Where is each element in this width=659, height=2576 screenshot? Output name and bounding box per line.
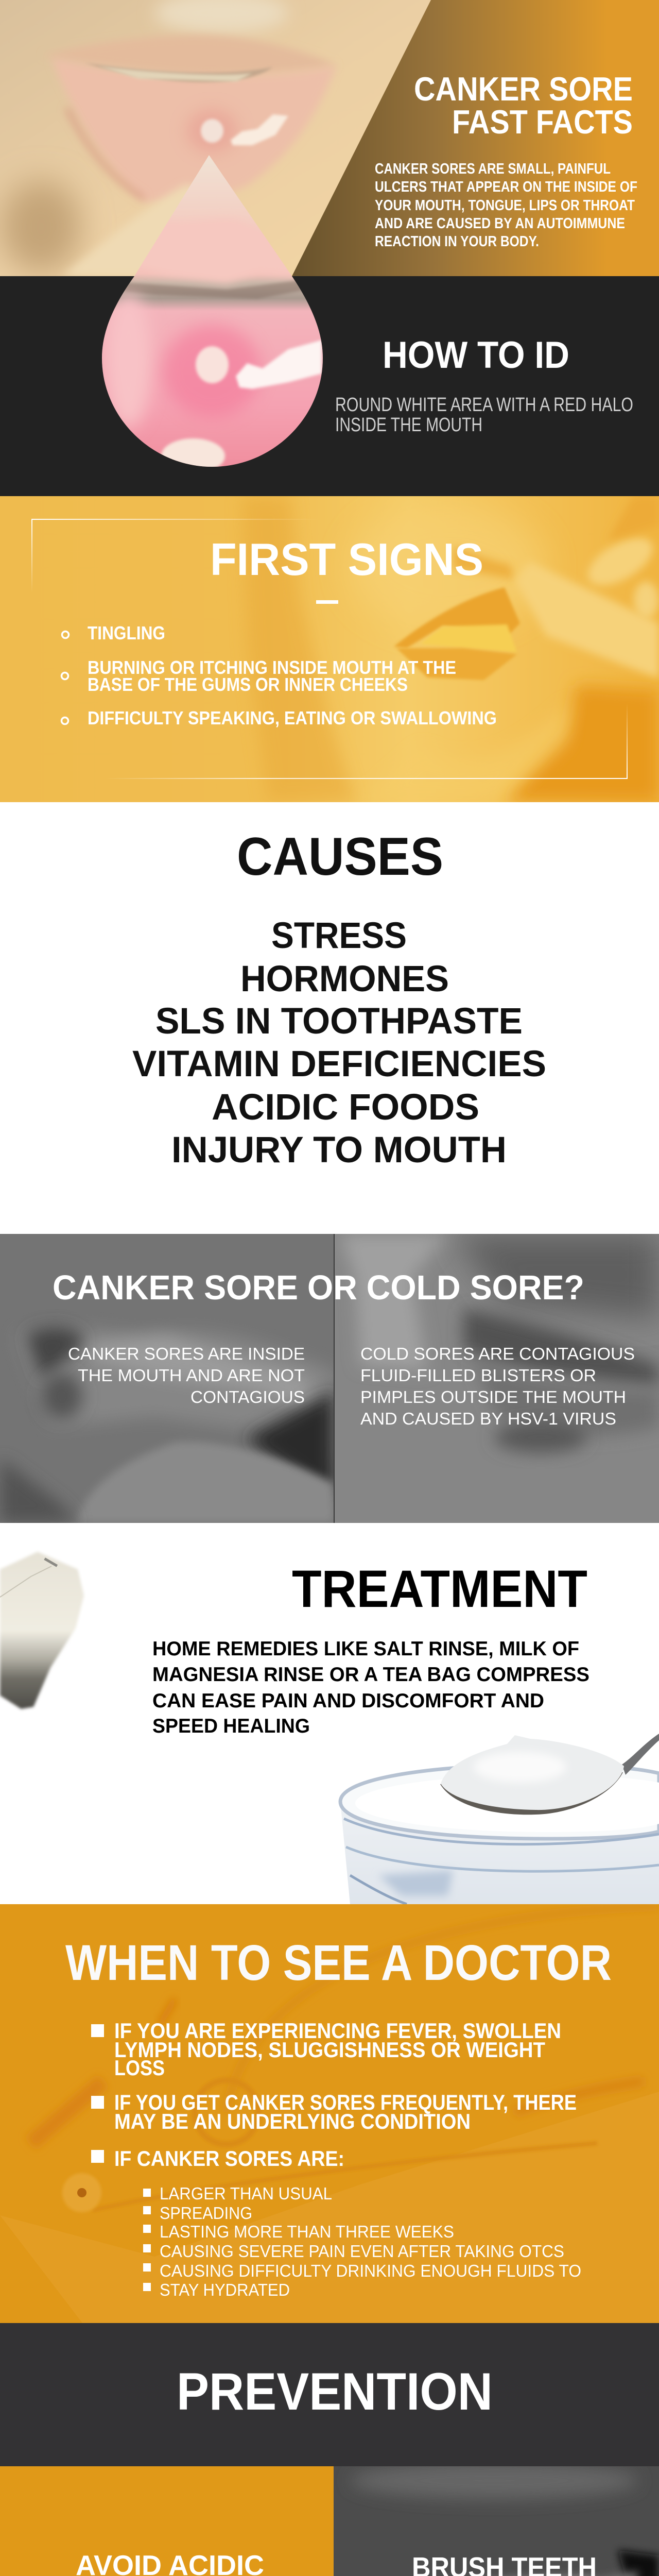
heading: canker sore or cold sore: CANKER SORE OR COLD SORE?	[53, 1268, 584, 1307]
text block: treatment: MAGNESIA RINSE OR A TEA BAG COMPRESS	[152, 1664, 589, 1686]
panel: prevention header	[0, 2323, 659, 2466]
text block: identification	[335, 394, 633, 436]
dark background	[0, 2323, 659, 2466]
text block: cold sores	[360, 1344, 635, 1428]
dark background	[0, 276, 659, 496]
list: canker sore warning signs: LARGER THAN USUAL	[160, 2184, 332, 2203]
list: canker sore warning signs: STAY HYDRATED	[160, 2280, 290, 2299]
list: first signs: BASE OF THE GUMS OR INNER CHEEKS	[88, 674, 408, 695]
heading: treatment: TREATMENT	[292, 1560, 587, 1618]
panel: treatment	[0, 1523, 659, 1904]
text block: cold sores: AND CAUSED BY HSV-1 VIRUS	[360, 1409, 616, 1428]
list: causes: STRESS	[271, 916, 407, 956]
gold gradient background	[0, 0, 659, 276]
list: canker sore warning signs	[143, 2184, 581, 2299]
text block: cold sores: PIMPLES OUTSIDE THE MOUTH	[360, 1387, 626, 1406]
panel: canker sore or cold sore	[0, 1234, 659, 1523]
photo: teeth in greyscale	[334, 2463, 659, 2576]
text block: definition	[375, 161, 637, 250]
text block: cold sores: FLUID-FILLED BLISTERS OR	[360, 1366, 596, 1385]
text block: cold sores: COLD SORES ARE CONTAGIOUS	[360, 1344, 635, 1363]
icon: glass with spoon of baking soda	[340, 1734, 659, 1904]
list: when to see a doctor: IF YOU ARE EXPERIENCING FEVER, SWOLLEN	[114, 2019, 561, 2043]
photo: citrus fruits	[0, 2466, 334, 2576]
text block: treatment: CAN EASE PAIN AND DISCOMFORT AND	[152, 1690, 544, 1712]
list: causes: SLS IN TOOTHPASTE	[155, 1001, 523, 1042]
title: canker sore fast facts: CANKER SORE	[414, 70, 633, 108]
list: canker sore warning signs: CAUSING DIFFICULTY DRINKING ENOUGH FLUIDS TO	[160, 2261, 581, 2280]
text block: canker sores: THE MOUTH AND ARE NOT	[78, 1366, 305, 1385]
text block: identification: INSIDE THE MOUTH	[335, 414, 482, 436]
list: causes: INJURY TO MOUTH	[171, 1130, 507, 1171]
list: causes: VITAMIN DEFICIENCIES	[132, 1044, 546, 1084]
list: canker sore warning signs: CAUSING SEVERE PAIN EVEN AFTER TAKING OTCS	[160, 2242, 564, 2261]
text block: canker sores: CANKER SORES ARE INSIDE	[68, 1344, 305, 1363]
list: canker sore warning signs: SPREADING	[160, 2204, 252, 2223]
list: first signs: BURNING OR ITCHING INSIDE MOUTH AT THE	[88, 657, 456, 678]
photo: canker sore in greyscale	[0, 1234, 334, 1523]
panel: when to see a doctor	[0, 1904, 659, 2323]
text block: definition: REACTION IN YOUR BODY.	[375, 233, 539, 250]
list: canker sore warning signs: LASTING MORE THAN THREE WEEKS	[160, 2222, 454, 2241]
heading: how to id: HOW TO ID	[383, 334, 569, 376]
list: when to see a doctor: LYMPH NODES, SLUGGISHNESS OR WEIGHT	[114, 2038, 545, 2062]
text block: canker sores	[68, 1344, 305, 1406]
panel: causes	[0, 802, 659, 1234]
list: first signs: DIFFICULTY SPEAKING, EATING OR SWALLOWING	[88, 707, 497, 728]
heading: prevention: PREVENTION	[177, 2362, 493, 2421]
list: causes	[132, 916, 546, 1171]
title: canker sore fast facts: FAST FACTS	[452, 103, 633, 141]
photo: stethoscope tinted orange	[0, 1904, 659, 2323]
panel: fast facts	[0, 0, 659, 276]
list: causes: HORMONES	[240, 959, 449, 999]
list: when to see a doctor	[91, 2019, 577, 2171]
heading: causes: CAUSES	[237, 827, 443, 887]
text block: canker sores: CONTAGIOUS	[190, 1387, 305, 1406]
decorative frame	[31, 519, 628, 779]
title: canker sore fast facts	[414, 70, 633, 141]
heading: first signs: FIRST SIGNS	[210, 534, 483, 585]
panel: avoid acidic foods	[0, 2466, 334, 2576]
text block: treatment: SPEED HEALING	[152, 1715, 310, 1737]
list: when to see a doctor: IF CANKER SORES ARE:	[114, 2146, 344, 2171]
list: first signs: TINGLING	[88, 622, 165, 643]
panel: brush teeth gently	[334, 2463, 659, 2576]
list: first signs	[62, 622, 497, 728]
icon: tea bag	[0, 1552, 84, 1709]
text block: treatment: HOME REMEDIES LIKE SALT RINSE, MILK OF	[152, 1638, 579, 1660]
panel: first signs	[0, 496, 659, 802]
list: when to see a doctor: MAY BE AN UNDERLYING CONDITION	[114, 2109, 471, 2133]
heading dash	[316, 600, 338, 604]
text block: definition: CANKER SORES ARE SMALL, PAINFUL	[375, 161, 611, 177]
photo: face with finger on lip	[0, 496, 659, 802]
icon: droplet magnifying the sore	[98, 152, 327, 473]
text block: treatment	[152, 1638, 589, 1737]
white background	[0, 802, 659, 1234]
list: when to see a doctor: IF YOU GET CANKER SORES FREQUENTLY, THERE	[114, 2090, 577, 2114]
photo: cold sore in greyscale	[334, 1234, 659, 1523]
photo: lip with canker sore	[0, 0, 432, 276]
list: when to see a doctor: LOSS	[114, 2056, 165, 2080]
panel: how to id	[0, 276, 659, 496]
white background	[0, 1523, 659, 1904]
list: causes: ACIDIC FOODS	[212, 1087, 479, 1128]
text block: definition: AND ARE CAUSED BY AN AUTOIMMUNE	[375, 215, 625, 232]
